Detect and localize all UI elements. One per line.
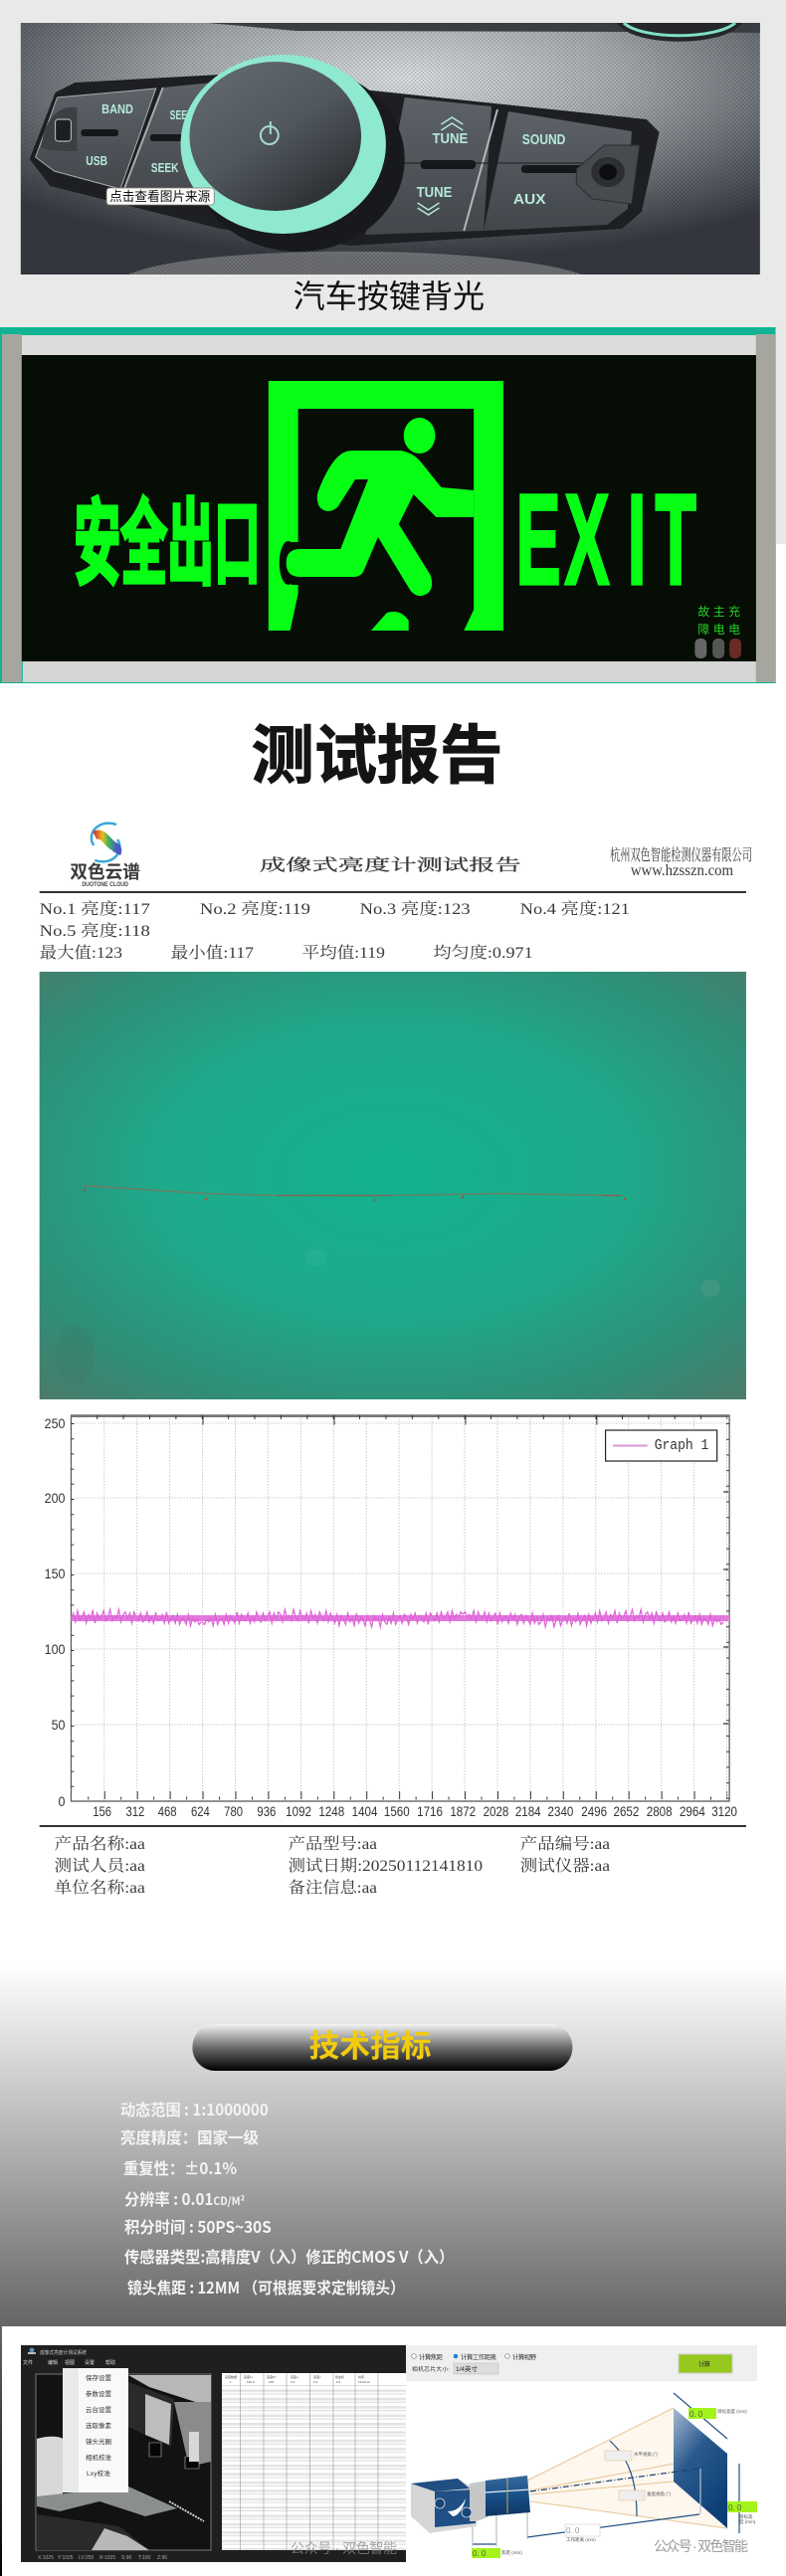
x axis labels: 2184 [515, 1803, 541, 1819]
x axis labels: 1092 [286, 1803, 311, 1819]
x axis labels [93, 1803, 737, 1819]
x axis labels: 1560 [384, 1803, 410, 1819]
x axis labels: 2808 [647, 1803, 673, 1819]
x axis labels: 936 [257, 1803, 276, 1819]
panel: teal luminance image [40, 972, 746, 1399]
logo: duotone cloud: 双色云谱 [70, 861, 140, 882]
y axis labels: 200 [45, 1490, 66, 1506]
data series: graph 1 [71, 1609, 729, 1627]
calc mode options: 相机芯片大小: [412, 2365, 450, 2373]
data table: 亮度数据 [225, 2374, 237, 2379]
legend [606, 1430, 717, 1461]
spec list [120, 2098, 454, 2299]
y axis labels: 0 [59, 1793, 66, 1809]
logo: duotone cloud: DUOTONE CLOUD [82, 882, 129, 888]
report info fields: 测试仪器:aa [520, 1857, 610, 1875]
report info fields: 产品名称:aa [55, 1835, 145, 1853]
x axis labels: 1248 [318, 1803, 344, 1819]
calc mode options: 1/4英寸 [456, 2364, 479, 2373]
dropdown menu: 云台设置 [86, 2405, 111, 2414]
readings: brightness values: No.1 亮度:117 [40, 900, 150, 918]
x axis labels: 468 [158, 1803, 177, 1819]
header divider [40, 891, 746, 893]
app title bar: 成像式亮度计测试系统 [40, 2349, 87, 2356]
volume knob with mint ring [181, 55, 405, 252]
input boxes and labels: 0. 0 [473, 2549, 487, 2558]
panel: technical specs gradient [0, 1964, 786, 2326]
readings: brightness values: 最大值:123 [40, 944, 122, 962]
x axis labels: 1872 [450, 1803, 476, 1819]
measurement line [83, 1186, 621, 1196]
left buttons: USB [86, 153, 107, 168]
dropdown menu [63, 2368, 128, 2492]
report info fields: 备注信息:aa [289, 1879, 377, 1897]
y axis labels: 150 [45, 1565, 66, 1581]
data table: 100 [269, 2380, 274, 2384]
status bar: S:90 [121, 2555, 132, 2561]
caption: car button backlight: 汽车按键背光 [294, 278, 485, 314]
data table [222, 2373, 406, 2550]
x axis labels: 2964 [680, 1803, 705, 1819]
status indicators: 障电电 [697, 622, 740, 637]
readings: brightness values: No.3 亮度:123 [360, 900, 471, 918]
heading pill: technical indicators [192, 2024, 572, 2071]
optical axis [530, 2469, 699, 2491]
calc mode options: 计算工作距离 [461, 2352, 497, 2361]
status bar: T:100 [138, 2555, 150, 2561]
office camera image [36, 2374, 211, 2550]
spec list: 分辨率 : 0.01CD/M² [124, 2187, 245, 2210]
readings: brightness values: 均匀度:0.971 [433, 944, 533, 962]
spec list: 积分时间 : 50PS~30S [124, 2215, 272, 2238]
dropdown menu: Lxy校准 [87, 2469, 111, 2478]
sign text: EXIT: EXIT [516, 466, 696, 612]
panel: software screenshot [21, 2345, 406, 2562]
x axis labels: 156 [93, 1803, 111, 1819]
page background: light grey top area [0, 0, 786, 328]
x axis labels: 3120 [711, 1803, 737, 1819]
input boxes and labels: 目标高 [739, 2513, 753, 2520]
report info fields: 产品编号:aa [520, 1835, 610, 1853]
input boxes and labels: 工作距离 (mm) [566, 2536, 596, 2543]
x axis labels: 780 [224, 1803, 243, 1819]
footer divider [40, 1825, 746, 1827]
calculate button: 计算 [698, 2359, 710, 2368]
calc mode options: 计算视野 [512, 2352, 537, 2361]
y axis labels [45, 1415, 66, 1809]
report title: 成像式亮度计测试报告 [260, 855, 521, 874]
dropdown menu: 保存设置 [86, 2373, 111, 2382]
line chart: brightness profile [45, 1415, 737, 1819]
readings: brightness values: No.4 亮度:121 [520, 900, 630, 918]
readings: brightness values [40, 900, 630, 962]
app title bar: 帮助 [105, 2359, 115, 2366]
calc mode options [412, 2352, 537, 2374]
data table: 时间 [358, 2374, 364, 2379]
right buttons: tune, sound, aux: SOUND [522, 131, 566, 148]
running figure [280, 418, 474, 631]
left buttons: BAND [101, 101, 133, 116]
heading: test report: 测试报告 [251, 720, 502, 792]
dropdown menu: 选取像素 [86, 2421, 111, 2430]
status indicators [694, 604, 741, 658]
input boxes and labels: 水平视角 (°) [634, 2451, 659, 2458]
input boxes and labels: 垂直视角 (°) [647, 2490, 672, 2497]
input boxes and labels: 焦距 (mm) [501, 2549, 522, 2556]
legend: Graph 1 [655, 1438, 708, 1454]
readings: brightness values: No.5 亮度:118 [40, 922, 150, 940]
dropdown menu: 参数设置 [86, 2389, 111, 2398]
spec list: 镜头焦距 : 12MM （可根据要求定制镜头） [127, 2276, 405, 2299]
left buttons [36, 82, 222, 204]
input boxes and labels: 0. 0 [689, 2410, 703, 2419]
readings: brightness values: No.2 亮度:119 [200, 900, 310, 918]
dropdown menu: 相机校准 [86, 2453, 111, 2462]
data table: 100.0 [247, 2380, 255, 2384]
x axis labels: 2496 [581, 1803, 607, 1819]
data table: 1 [230, 2380, 232, 2384]
x axis labels: 1716 [417, 1803, 443, 1819]
x axis labels: 624 [191, 1803, 210, 1819]
logo: duotone cloud [70, 824, 140, 888]
right buttons: tune, sound, aux: AUX [513, 191, 546, 208]
status bar: LV:255 [79, 2555, 95, 2561]
spec list: 亮度精度：国家一级 [120, 2125, 259, 2148]
report info fields: 单位名称:aa [55, 1879, 145, 1897]
sign text: safe exit: 安全出口 [74, 491, 261, 596]
input boxes and labels: 度 (mm) [739, 2518, 756, 2525]
right buttons: tune, sound, aux: TUNE [417, 184, 452, 201]
report info fields [55, 1835, 610, 1897]
calculate button [679, 2354, 732, 2373]
company name and website: www.hzsszn.com [631, 862, 734, 879]
target plane [674, 2408, 727, 2528]
grid lines [71, 1415, 729, 1801]
data table: 0.3 [313, 2380, 318, 2384]
readings: brightness values: 平均值:119 [302, 944, 385, 962]
right buttons: tune, sound, aux [365, 97, 640, 235]
input boxes and labels: 0. 0 [566, 2526, 580, 2535]
control panel body [30, 75, 660, 246]
spec list: 重复性：±0.1% [123, 2156, 237, 2179]
x axis labels: 1404 [352, 1803, 378, 1819]
panel: focal length calculator [406, 2345, 757, 2559]
left buttons: SEEK [151, 160, 179, 175]
top dark trim with mint ring [207, 23, 760, 42]
input boxes and labels: 0. 0 [728, 2503, 742, 2512]
data table: 12:00:12 [358, 2380, 370, 2384]
data table: 0.3 [336, 2380, 341, 2384]
data table: 色坐标 [335, 2374, 344, 2379]
status bar: X:1025 [38, 2555, 54, 2561]
app title bar: 文件 [23, 2359, 33, 2366]
input boxes and labels [472, 2408, 757, 2558]
tooltip: image source: 点击查看图片来源 [109, 189, 210, 204]
door frame [269, 381, 503, 631]
data table: 0.3 [291, 2380, 295, 2384]
dropdown menu: 镜头光圈 [86, 2437, 111, 2446]
y axis labels: 100 [45, 1641, 66, 1657]
x axis labels: 2340 [548, 1803, 574, 1819]
left edge strip [0, 2326, 2, 2576]
plot frame and ticks [71, 1415, 729, 1801]
panel: exit sign photo [0, 327, 786, 683]
data table: 亮度v [313, 2374, 321, 2379]
watermark: left: 公众号 · 双色智能 [291, 2540, 397, 2556]
x axis labels: 2652 [614, 1803, 640, 1819]
app title bar: 设置 [85, 2359, 95, 2366]
spec list: 动态范围 : 1:1000000 [120, 2098, 269, 2120]
report info fields: 产品型号:aa [289, 1835, 377, 1853]
status indicators: 故主充 [697, 604, 740, 619]
readings: brightness values: 最小值:117 [171, 944, 254, 962]
app title bar: 视图 [65, 2359, 75, 2366]
app title bar: 编辑 [48, 2359, 58, 2366]
input boxes and labels: 目标宽度 (mm) [717, 2408, 747, 2415]
report info fields: 测试日期:20250112141810 [289, 1857, 483, 1875]
status bar: Y:1025 [58, 2555, 74, 2561]
y axis labels: 50 [52, 1717, 66, 1733]
x axis labels: 2028 [484, 1803, 509, 1819]
app title bar [23, 2347, 115, 2366]
status bar: Z:96 [157, 2555, 167, 2561]
view cone [525, 2408, 727, 2528]
watermark: right: 公众号 · 双色智能 [654, 2538, 748, 2554]
data table: 亮度u [291, 2374, 298, 2379]
calc mode options: 计算焦距 [419, 2352, 444, 2361]
data table: 亮度Lv [244, 2374, 254, 2379]
dimension arrows [473, 2393, 739, 2546]
left buttons: SEEK [170, 107, 194, 122]
status bar: R:1025 [99, 2555, 115, 2561]
data table: 亮度Px [267, 2374, 277, 2379]
status bar [38, 2555, 167, 2561]
heading pill: technical indicators: 技术指标 [308, 2029, 432, 2064]
camera body [411, 2476, 530, 2533]
right buttons: tune, sound, aux: TUNE [432, 130, 468, 147]
report info fields: 测试人员:aa [55, 1857, 145, 1875]
y axis labels: 250 [45, 1415, 66, 1431]
spec list: 传感器类型:高精度V（入）修正的CMOS V（入） [124, 2245, 454, 2268]
panel: car button backlight photo [21, 23, 760, 275]
company name and website [610, 846, 752, 879]
x axis labels: 312 [125, 1803, 145, 1819]
